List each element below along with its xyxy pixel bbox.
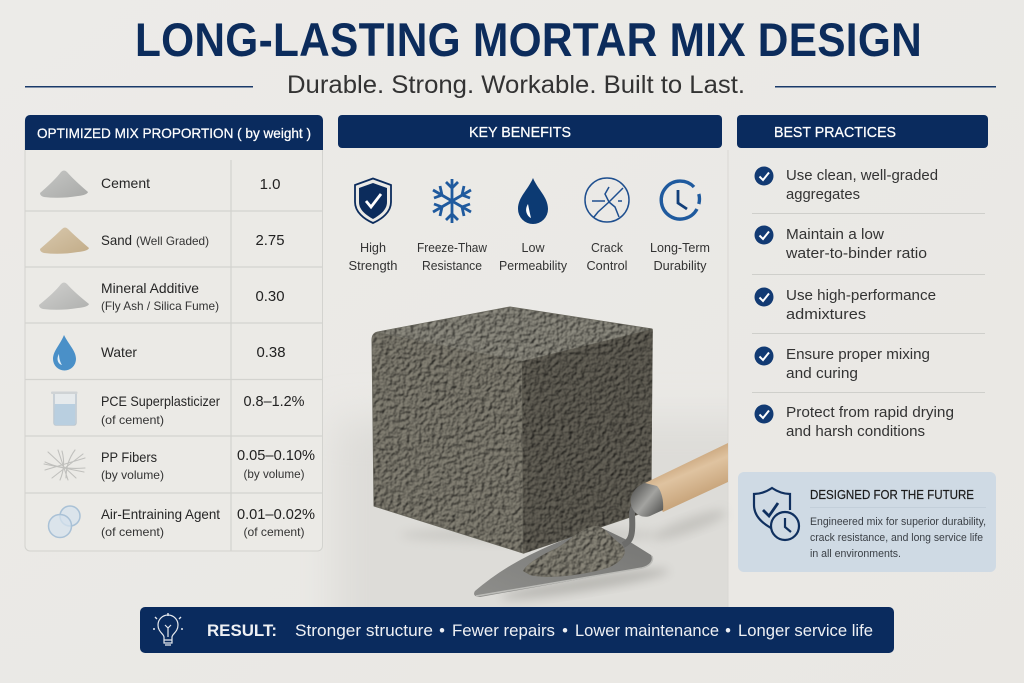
benefit: crack control [585,178,629,273]
row: PP fibers: (by volume) [101,468,164,482]
practice 5: and harsh conditions [786,423,925,440]
title: LONG-LASTING MORTAR MIX DESIGN [135,13,922,66]
panel: best practices list [752,166,985,440]
row: PCE superplasticizer [51,392,304,427]
practice 3 [754,287,936,323]
row: mineral additive: Mineral Additive [101,280,199,296]
row: cement: 1.0 [260,176,280,193]
panel heading: key benefits: KEY BENEFITS [469,125,571,141]
practice 1 [754,166,938,203]
callout: designed for the future: DESIGNED FOR THE FUTURE [810,488,974,502]
benefit: freeze-thaw resistance: Freeze-Thaw [417,240,488,255]
benefit: freeze-thaw resistance: Resistance [422,258,482,273]
result bar: RESULT: [207,621,277,640]
practice 1: aggregates [786,186,860,203]
practice 1: Use clean, well-graded [786,167,938,184]
icon: water drop [53,335,76,370]
result bar: Fewer repairs [452,622,555,640]
result bar: Lower maintenance [575,622,719,640]
benefit: crack control: Control [586,258,628,273]
benefit: crack control: Crack [591,240,623,255]
table heading [25,115,323,150]
result bar: Stronger structure [295,622,433,640]
benefit: freeze-thaw resistance [417,179,488,273]
practice 5 [754,404,954,440]
practice 5: Protect from rapid drying [786,404,954,421]
icon: shield with clock [754,488,799,540]
row: sand [40,228,284,254]
benefit: long-term durability [650,181,710,273]
practice 2: Maintain a low [786,226,884,243]
row: mineral additive: (Fly Ash / Silica Fume) [101,299,219,313]
trowel [474,443,728,604]
practice 4 [754,346,930,382]
callout: designed for the future: Engineered mix for superior durability, [810,516,986,528]
callout: designed for the future: in all environments. [810,548,901,560]
benefit: long-term durability: Durability [654,258,707,273]
row: PCE superplasticizer: (of cement) [101,413,164,427]
practice 2 [754,226,927,262]
row: air-entraining agent: 0.01–0.02% [237,506,315,523]
panel: key benefits icons [348,178,710,273]
row: mineral additive: 0.30 [256,288,284,305]
row: mineral additive [39,280,284,313]
panel heading: best practices: BEST PRACTICES [774,125,896,141]
row: PCE superplasticizer: 0.8–1.2% [244,393,304,410]
icon: beaker [51,392,78,425]
practice 4: and curing [786,365,858,382]
image: mortar cube with trowel [372,307,728,604]
row: PP fibers [44,447,315,482]
panel: mix proportion table [25,115,323,551]
panel heading: key benefits [338,115,722,148]
cube [372,307,653,554]
benefit: long-term durability: Long-Term [650,240,710,255]
row: air-entraining agent: (of cement) [101,525,164,539]
result bar: Longer service life [738,622,873,640]
practice 4: Ensure proper mixing [786,346,930,363]
benefit: low permeability: Low [522,240,545,255]
row: PP fibers: (by volume) [244,467,304,481]
benefit: low permeability [499,178,567,273]
icon: fibers [44,450,85,480]
benefit: high strength: High [360,240,386,255]
row: sand: (Well Graded) [136,234,209,248]
row: water: Water [101,344,137,360]
result bar [140,607,894,653]
benefit: high strength: Strength [348,258,398,273]
subtitle: Durable. Strong. Workable. Built to Last. [287,71,745,99]
row: water [53,335,286,370]
benefit: high strength [348,178,398,273]
row: PCE superplasticizer: PCE Superplasticizer [101,393,220,409]
row: sand: Sand [101,232,132,248]
benefit: low permeability: Permeability [499,258,567,273]
icon: bubbles [48,506,80,538]
row: air-entraining agent: (of cement) [244,525,305,539]
practice 2: water-to-binder ratio [785,245,927,262]
callout: designed for the future: crack resistance, and long service life [810,532,983,544]
row: PP fibers: 0.05–0.10% [237,447,315,464]
row: PP fibers: PP Fibers [101,449,157,465]
row: cement [40,170,280,198]
mortar on trowel [523,526,625,577]
row: air-entraining agent: Air-Entraining Agent [101,506,220,522]
result bar: • [439,622,445,640]
row: air-entraining agent [48,506,315,539]
result bar: • [562,622,568,640]
practice 3: Use high-performance [786,287,936,304]
panel heading: best practices [737,115,988,148]
icon: light bulb [153,613,183,645]
table heading: OPTIMIZED MIX PROPORTION ( by weight ) [37,125,311,141]
practice 3: admixtures [786,306,866,323]
row: sand: 2.75 [256,232,284,249]
callout: designed for the future [738,472,996,572]
cube shadow [400,527,660,543]
result bar: • [725,622,731,640]
row: water: 0.38 [256,344,286,361]
row: cement: Cement [101,175,150,191]
